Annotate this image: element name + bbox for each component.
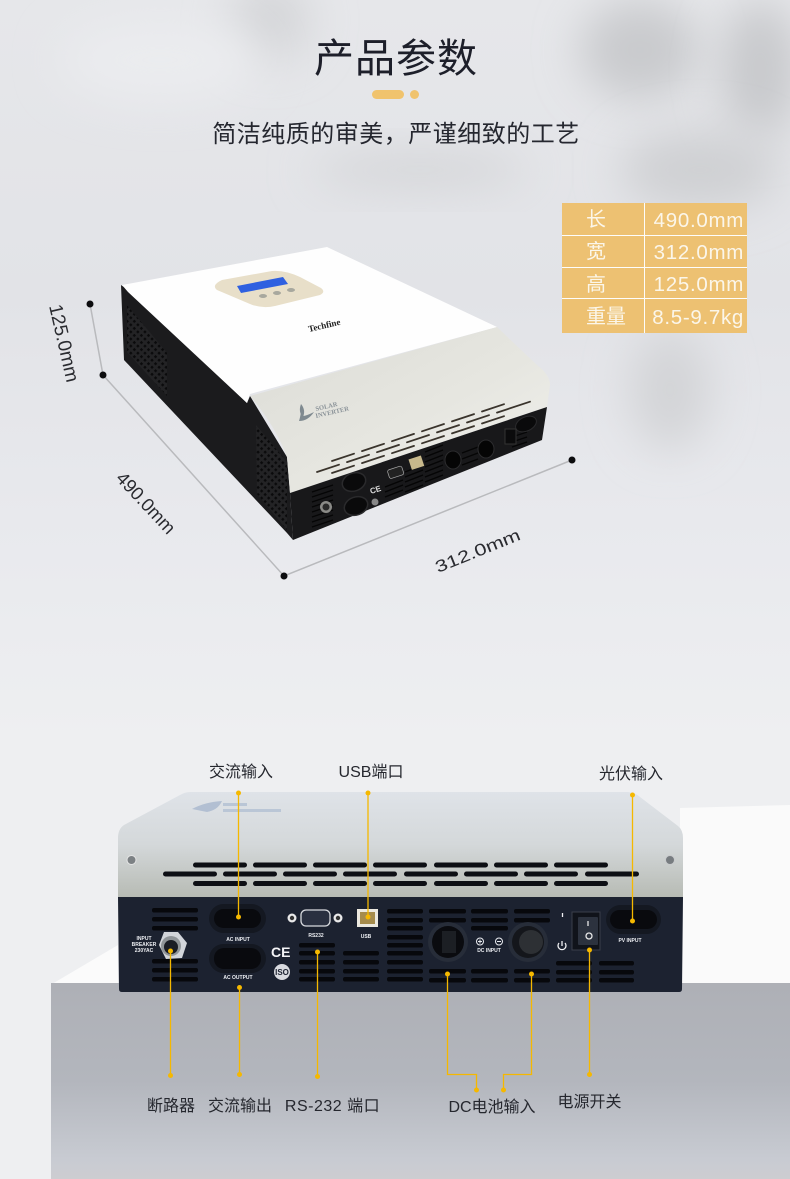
panel printed labels: RS232 — [308, 933, 324, 939]
callout: AC output — [208, 985, 272, 1115]
specification table: 125.0mm — [654, 273, 744, 296]
product photo: rear view of inverter — [118, 792, 683, 992]
dimension label: length: 490.0mm — [112, 467, 180, 538]
ISO mark — [274, 964, 290, 980]
DC terminals — [428, 922, 548, 962]
black front connector panel — [290, 407, 547, 540]
product photo: perspective view of inverter — [121, 247, 550, 540]
panel printed labels: PV INPUT — [618, 938, 642, 944]
front panel connectors: CE — [369, 484, 383, 496]
callout: AC output: 交流输出 — [208, 1097, 272, 1115]
light top cover — [118, 792, 683, 897]
AC output socket — [209, 944, 266, 973]
callout: breaker — [147, 948, 195, 1115]
panel printed labels: AC INPUT — [226, 937, 250, 943]
specification table: 312.0mm — [654, 241, 744, 264]
callout: USB port: USB端口 — [339, 763, 403, 781]
cover vent slots — [163, 862, 639, 886]
callout: RS-232 port — [285, 950, 380, 1115]
specification table: 宽 — [586, 240, 606, 263]
specification table: 重量 — [586, 305, 626, 328]
subtitle: 简洁纯质的审美，严谨细致的工艺 — [212, 121, 580, 148]
leaf logo and product text: SOLAR — [315, 401, 339, 413]
panel printed labels: USB — [361, 934, 372, 940]
specification table: 高 — [586, 273, 606, 296]
front panel connectors — [320, 413, 539, 519]
brand name: Techfine — [307, 317, 341, 334]
specification table: 490.0mm — [654, 209, 744, 232]
callout: PV input — [599, 765, 663, 924]
RS232 port — [288, 910, 342, 926]
AC input socket — [209, 904, 266, 933]
side vent mesh near rear — [127, 305, 167, 396]
screws on cover — [127, 856, 136, 864]
USB port — [357, 909, 378, 927]
callout: PV input: 光伏输入 — [599, 765, 663, 783]
leaf logo and product text: INVERTER — [315, 405, 350, 420]
callout: USB port — [339, 763, 403, 920]
ISO mark: ISO — [275, 968, 289, 977]
front panel vents — [312, 432, 527, 527]
power icon — [558, 913, 566, 950]
callout: AC input — [209, 763, 273, 920]
callout: AC input: 交流输入 — [209, 763, 273, 781]
power rocker switch — [572, 912, 600, 950]
dark connector panel — [118, 897, 683, 992]
side vent mesh near front — [256, 425, 287, 530]
panel printed labels: INPUT — [136, 936, 152, 942]
panel printed labels: BREAKER — [132, 942, 157, 948]
panel vents — [152, 908, 634, 982]
specification table: 8.5-9.7kg — [652, 306, 744, 329]
control panel — [215, 271, 323, 307]
dimension label: height: 125.0mm — [44, 302, 82, 384]
title: 产品参数 — [314, 37, 478, 81]
DC polarity symbols — [476, 938, 502, 945]
specification table: 长 — [586, 208, 606, 231]
leaf logo and product text — [299, 401, 350, 421]
input breaker — [159, 932, 187, 959]
panel printed labels: AC OUTPUT — [223, 975, 253, 981]
dimension label: width: 312.0mm — [432, 526, 523, 577]
panel printed labels — [132, 933, 642, 981]
callout: breaker: 断路器 — [147, 1097, 195, 1115]
panel printed labels: 230YAC — [135, 948, 154, 954]
panel printed labels: DC INPUT — [477, 948, 501, 954]
faded logo on cover — [192, 801, 281, 812]
front cover vent slots — [317, 402, 530, 473]
specification table — [562, 203, 747, 333]
callout: power switch — [557, 948, 622, 1111]
dimension lines — [86, 300, 576, 580]
callout: power switch: 电源开关 — [557, 1093, 622, 1111]
CE mark: CE — [271, 944, 290, 960]
white top cover — [122, 247, 497, 403]
callout: RS-232 port: RS-232 端口 — [285, 1097, 380, 1115]
callout: DC battery input — [445, 972, 536, 1116]
front sloped cover — [250, 327, 550, 493]
callout: DC battery input: DC电池输入 — [448, 1098, 536, 1116]
left side of case — [121, 285, 293, 540]
PV input socket — [606, 905, 661, 934]
title accent: pill and dot — [372, 90, 419, 99]
